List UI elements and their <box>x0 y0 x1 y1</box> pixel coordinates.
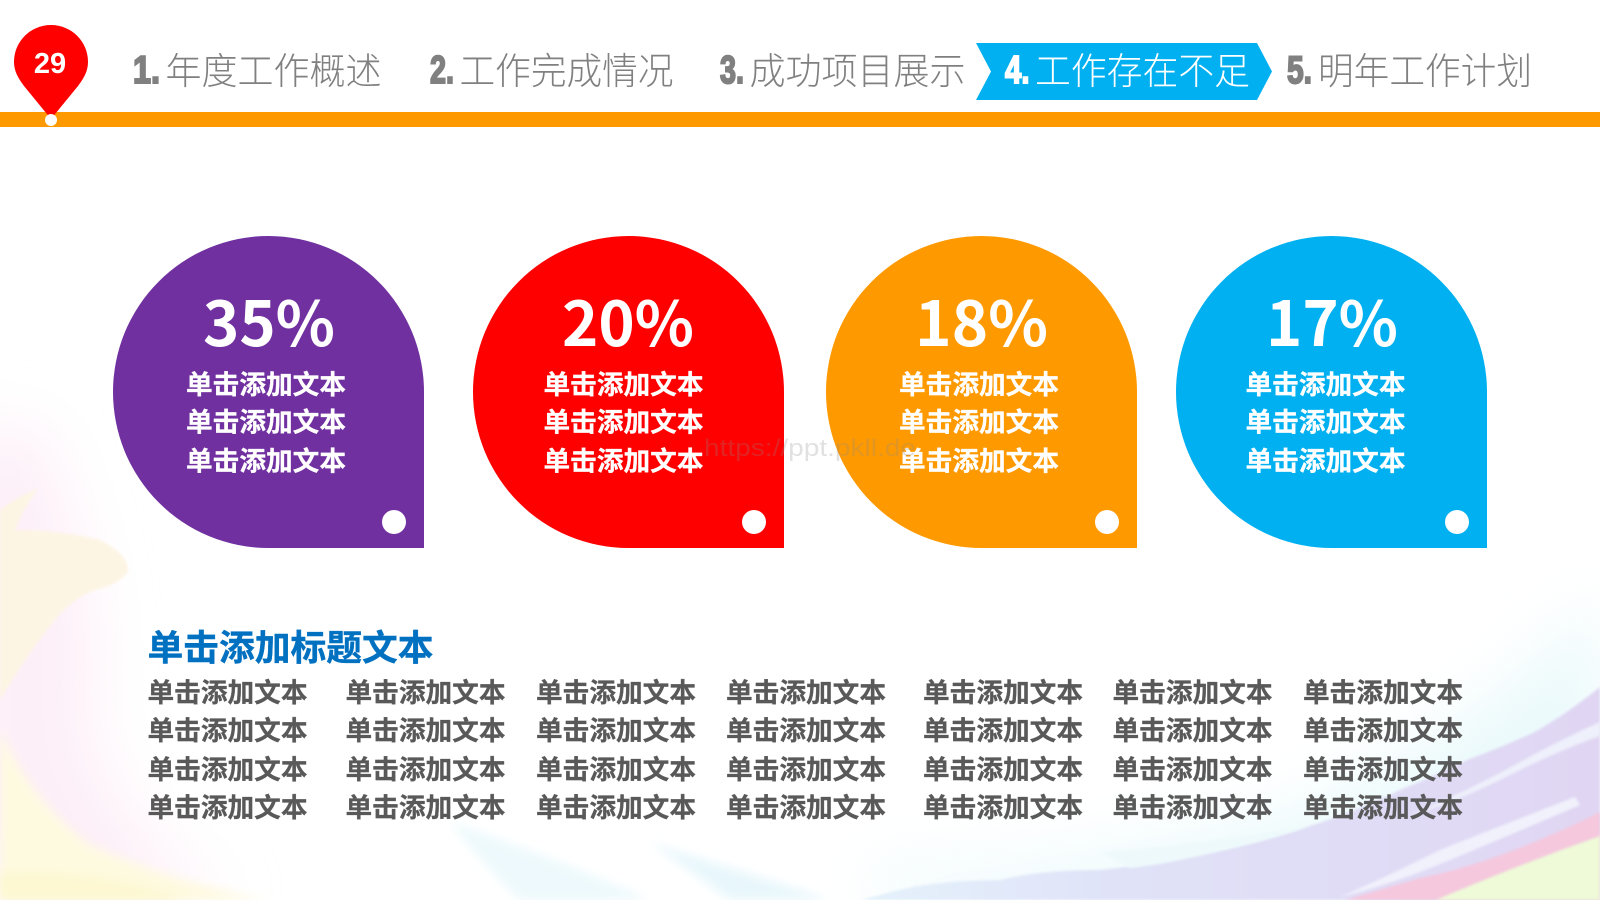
text block: column 2: 单击添加文本 <box>346 748 506 787</box>
text block: column 5: 单击添加文本 <box>923 671 1083 710</box>
text block: column 6: 单击添加文本 <box>1112 671 1272 710</box>
text block: column 5 <box>923 671 1083 825</box>
panel: purple drop 35%: 35% <box>203 274 335 364</box>
nav item 3: 成功项目展示 <box>750 41 966 95</box>
text block: column 6: 单击添加文本 <box>1112 709 1272 748</box>
panel: red drop 20%: 单击添加文本 <box>544 363 704 402</box>
orange header bar <box>0 112 1600 127</box>
text block: column 6: 单击添加文本 <box>1112 786 1272 825</box>
panel: orange drop 18%: 18% <box>915 274 1048 364</box>
panel: purple drop 35% <box>113 236 424 548</box>
text block: column 1: 单击添加文本 <box>148 786 308 825</box>
text block: column 2: 单击添加文本 <box>346 786 506 825</box>
text block: column 4: 单击添加文本 <box>726 786 886 825</box>
nav item 5: 明年工作计划 <box>1318 41 1532 95</box>
text block: column 4: 单击添加文本 <box>726 671 886 710</box>
text block: column 6: 单击添加文本 <box>1112 748 1272 787</box>
text block: column 7: 单击添加文本 <box>1303 671 1463 710</box>
text block: column 7: 单击添加文本 <box>1303 786 1463 825</box>
panel: blue drop 17%: 单击添加文本 <box>1246 440 1406 478</box>
panel: orange drop 18%: 单击添加文本 <box>899 440 1059 478</box>
nav item 5: 5. <box>1287 49 1312 92</box>
text block: column 3: 单击添加文本 <box>536 786 696 825</box>
panel: red drop 20%: 单击添加文本 <box>544 440 704 478</box>
panel: orange drop 18% <box>826 236 1137 548</box>
panel: blue drop 17%: 单击添加文本 <box>1246 363 1406 402</box>
text block: column 1: 单击添加文本 <box>148 709 308 748</box>
text block: column 5: 单击添加文本 <box>923 748 1083 787</box>
nav item 1: 1. <box>133 49 160 92</box>
text block: column 4: 单击添加文本 <box>726 709 886 748</box>
text block: column 5: 单击添加文本 <box>923 786 1083 825</box>
watermark: https://ppt.pkll.de <box>704 435 916 462</box>
text block: column 1: 单击添加文本 <box>148 748 308 787</box>
text block: column 3: 单击添加文本 <box>536 709 696 748</box>
page number pin <box>14 25 88 126</box>
text block: column 7: 单击添加文本 <box>1303 748 1463 787</box>
panel: red drop 20% <box>473 236 784 548</box>
nav item 2: 2. <box>430 49 454 92</box>
nav item 3: 3. <box>720 49 744 92</box>
text block: column 1: 单击添加文本 <box>148 671 308 710</box>
nav item 4 active tab: 工作存在不足 <box>1035 41 1250 95</box>
panel: red drop 20%: 单击添加文本 <box>544 400 704 440</box>
heading: 单击添加标题文本 <box>148 620 434 671</box>
panel: purple drop 35%: 单击添加文本 <box>186 400 346 440</box>
text block: column 5: 单击添加文本 <box>923 709 1083 748</box>
panel: purple drop 35%: 单击添加文本 <box>186 440 346 478</box>
nav item 2: 工作完成情况 <box>460 41 674 95</box>
text block: column 4: 单击添加文本 <box>726 748 886 787</box>
panel: blue drop 17% <box>1176 236 1487 548</box>
text block: column 2: 单击添加文本 <box>346 709 506 748</box>
text block: column 4 <box>726 671 886 825</box>
text block: column 1 <box>148 671 308 825</box>
nav item 4 active tab: 4. <box>1005 49 1030 92</box>
nav item 1: 年度工作概述 <box>166 41 382 95</box>
nav item 4 active tab <box>976 41 1272 100</box>
page number pin: 29 <box>34 48 66 80</box>
panel: purple drop 35%: 单击添加文本 <box>186 363 346 402</box>
text block: column 3: 单击添加文本 <box>536 671 696 710</box>
panel: red drop 20%: 20% <box>562 274 694 364</box>
text block: column 7 <box>1303 671 1463 825</box>
text block: column 2 <box>346 671 506 825</box>
text block: column 6 <box>1112 671 1272 825</box>
panel: blue drop 17%: 17% <box>1266 274 1398 364</box>
panel: blue drop 17%: 单击添加文本 <box>1246 400 1406 440</box>
text block: column 2: 单击添加文本 <box>346 671 506 710</box>
text block: column 7: 单击添加文本 <box>1303 709 1463 748</box>
text block: column 3: 单击添加文本 <box>536 748 696 787</box>
panel: orange drop 18%: 单击添加文本 <box>899 363 1059 402</box>
text block: column 3 <box>536 671 696 825</box>
panel: orange drop 18%: 单击添加文本 <box>899 400 1059 440</box>
